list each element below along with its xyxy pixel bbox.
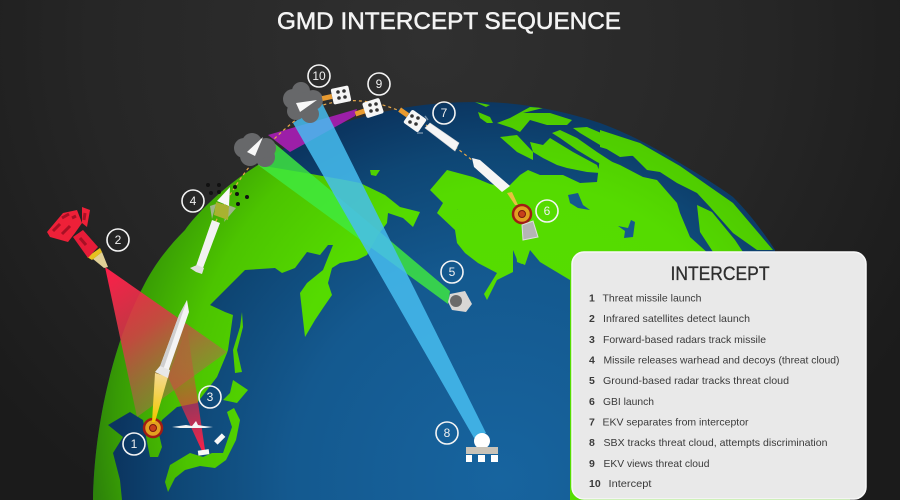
globe xyxy=(93,102,850,500)
icon: EKV viewing cloud xyxy=(355,98,384,118)
legend row 10 xyxy=(589,478,652,490)
icon: missile stage xyxy=(190,187,236,274)
marker 4 xyxy=(182,190,204,212)
legend row 5: 5 xyxy=(589,375,595,387)
marker 9 xyxy=(368,73,390,95)
marker 3 xyxy=(199,386,221,408)
lakes xyxy=(568,193,635,238)
legend row 4: Missile releases warhead and decoys (threat cloud) xyxy=(604,354,840,366)
marker 3: 3 xyxy=(207,390,214,404)
marker 6: 6 xyxy=(544,204,551,218)
legend row 6: 6 xyxy=(589,396,595,408)
icon: GBI flame xyxy=(507,192,518,205)
trajectory arc xyxy=(197,101,472,272)
marker 8: 8 xyxy=(444,426,451,440)
marker 8 xyxy=(436,422,458,444)
legend row 8: 8 xyxy=(589,437,595,449)
legend row 4: 4 xyxy=(589,354,595,366)
legend row 10: Intercept xyxy=(608,478,652,490)
marker 9: 9 xyxy=(376,77,383,91)
marker 10: 10 xyxy=(312,69,326,83)
icon: interceptor booster xyxy=(425,123,459,151)
icon: threat cloud upper xyxy=(283,82,323,123)
legend row 10: 10 xyxy=(589,478,601,490)
legend row 7: 7 xyxy=(589,416,595,428)
legend row 2: Infrared satellites detect launch xyxy=(603,313,750,325)
icon: radar near GBI site xyxy=(522,221,538,240)
satellite nozzle xyxy=(93,252,108,268)
beam: green ground radar xyxy=(258,142,450,304)
legend row 3: 3 xyxy=(589,334,595,346)
icon: SBX sea radar xyxy=(466,433,498,462)
legend row 7: EKV separates from interceptor xyxy=(602,416,749,428)
marker 2 xyxy=(107,229,129,251)
marker 1: 1 xyxy=(131,437,138,451)
beam: purple EKV view xyxy=(268,109,357,152)
legend row 1: 1 xyxy=(589,292,595,304)
legend row 6: GBI launch xyxy=(603,396,654,408)
legend row 2: 2 xyxy=(589,313,595,325)
icon: forward radars xyxy=(198,433,225,456)
marker 6 xyxy=(536,200,558,222)
legend heading: INTERCEPT xyxy=(670,264,770,285)
icon: EKV at intercept xyxy=(322,85,351,105)
marker 2: 2 xyxy=(115,233,122,247)
legend row 9: EKV views threat cloud xyxy=(604,458,710,470)
icon: flame 1 xyxy=(152,373,168,422)
satellite body xyxy=(73,230,98,258)
marker 5: 5 xyxy=(449,265,456,279)
beam: forward radar xyxy=(168,327,205,451)
marker 1 xyxy=(123,433,145,455)
icon: GBI missile xyxy=(472,158,510,192)
land: small islands xyxy=(370,170,525,264)
marker 5 xyxy=(441,261,463,283)
land: Japan xyxy=(165,312,248,492)
beam: infrared satellite xyxy=(105,267,227,417)
land: Asia xyxy=(93,165,420,500)
satellite solar panels xyxy=(47,210,82,242)
legend row 1: Threat missile launch xyxy=(602,292,702,304)
land: northern islands xyxy=(475,102,773,255)
satellite solar panel top xyxy=(82,207,90,227)
icon: infrared satellite xyxy=(47,207,108,268)
legend row 8: SBX tracks threat cloud, attempts discrimination xyxy=(604,437,828,449)
icon: EKV separating xyxy=(398,107,428,133)
marker 4: 4 xyxy=(190,194,197,208)
icon: threat cloud lower xyxy=(234,133,276,167)
icon: launch target 6 xyxy=(513,205,531,223)
marker 10 xyxy=(308,65,330,87)
panel: intercept legend xyxy=(572,252,866,499)
legend row 3: Forward-based radars track missile xyxy=(603,334,766,346)
marker 7: 7 xyxy=(441,106,448,120)
satellite panel cells xyxy=(53,213,86,245)
icon: decoys xyxy=(206,183,249,206)
icon: threat missile xyxy=(155,300,189,378)
land: far east mainland xyxy=(430,157,860,500)
icon: launch target 1 xyxy=(144,419,162,437)
beam: blue SBX xyxy=(293,103,486,438)
title: GMD INTERCEPT SEQUENCE xyxy=(277,8,621,35)
marker 7 xyxy=(433,102,455,124)
satellite gold band xyxy=(87,248,102,260)
legend row 5: Ground-based radar tracks threat cloud xyxy=(603,375,789,387)
legend row 9: 9 xyxy=(589,458,595,470)
icon: ground radar xyxy=(448,291,472,312)
icon: sea-based ship xyxy=(172,421,213,428)
